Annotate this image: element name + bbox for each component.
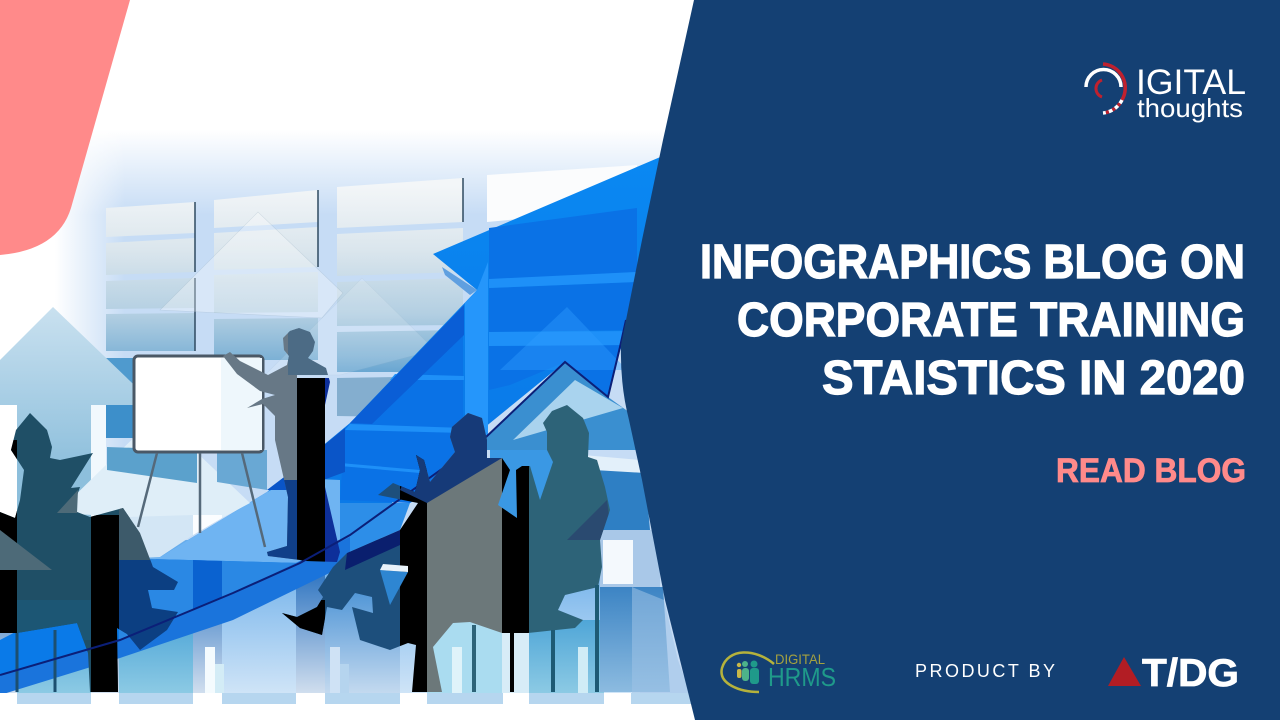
base strip <box>0 693 700 704</box>
HRMS wordmark: DIGITAL <box>775 651 825 667</box>
whiteboard legs <box>138 453 265 547</box>
seated figures chair legs <box>474 585 597 692</box>
backdrop glow <box>0 130 700 704</box>
title: STAISTICS IN 2020 <box>822 352 1245 405</box>
left figure chair <box>17 630 55 692</box>
left house arrow <box>0 307 155 525</box>
shaft mid blue <box>340 503 410 556</box>
product by label: PRODUCT BY <box>915 661 1055 681</box>
band under curve <box>0 537 350 695</box>
shaft dark edge <box>267 428 345 490</box>
window panes <box>106 178 463 438</box>
presenter silhouette <box>223 328 340 562</box>
arrow shadow notch <box>442 267 477 295</box>
title <box>700 236 1245 405</box>
shaft gap stripe <box>193 560 222 609</box>
lower background with stripes <box>0 540 640 693</box>
grey triangle on figure <box>57 490 78 513</box>
logo icon arcs <box>1086 64 1125 113</box>
logo: Digital HRMS: HRMS <box>768 662 836 692</box>
call to action: READ BLOG <box>1056 452 1246 490</box>
T/DG triangle <box>1108 657 1141 686</box>
HRMS swoosh <box>722 652 774 692</box>
pale arrow over team <box>513 380 623 440</box>
logo: Digital Thoughts <box>1086 63 1246 123</box>
pale shaft <box>128 515 193 558</box>
HRMS people icon <box>737 660 759 684</box>
window frame dark edges <box>195 178 463 351</box>
blue panes lower right <box>485 362 690 693</box>
logo: Digital HRMS <box>722 651 836 692</box>
arrow rim dark band <box>350 305 464 424</box>
lower window panes <box>107 447 267 490</box>
arrow lighter vertical strip <box>465 262 488 470</box>
knee gap highlight <box>380 564 408 572</box>
arrow light translucent head <box>500 307 627 370</box>
mid arrow behind seated figure <box>57 415 250 535</box>
arrow darker panes <box>340 208 637 503</box>
lighter shaft area <box>150 478 340 563</box>
large blue growth arrow <box>0 155 665 695</box>
T/DG wordmark: T/DG <box>1142 652 1239 695</box>
title: CORPORATE TRAINING <box>737 294 1245 347</box>
white bar beneath board <box>193 515 222 535</box>
knee gap triangle <box>380 570 408 605</box>
seated figure left <box>0 410 184 700</box>
logo: T/DG <box>1108 652 1239 695</box>
seated figures centre and right <box>280 405 619 695</box>
logo tagline: thoughts <box>1137 93 1243 123</box>
growth line <box>0 320 626 675</box>
navy content panel <box>621 0 1280 720</box>
translucent up arrows <box>160 212 435 375</box>
shaft blue lower <box>119 559 300 640</box>
coral corner shape <box>0 0 130 255</box>
whiteboard <box>134 356 265 547</box>
top pale window column <box>487 165 637 222</box>
logo wordmark: IGITAL <box>1136 63 1246 102</box>
arrow stem gaps <box>0 405 106 520</box>
illustration: business team with growth chart <box>0 130 700 704</box>
arrow lighter rails <box>340 272 637 473</box>
grey triangle left <box>0 530 52 570</box>
